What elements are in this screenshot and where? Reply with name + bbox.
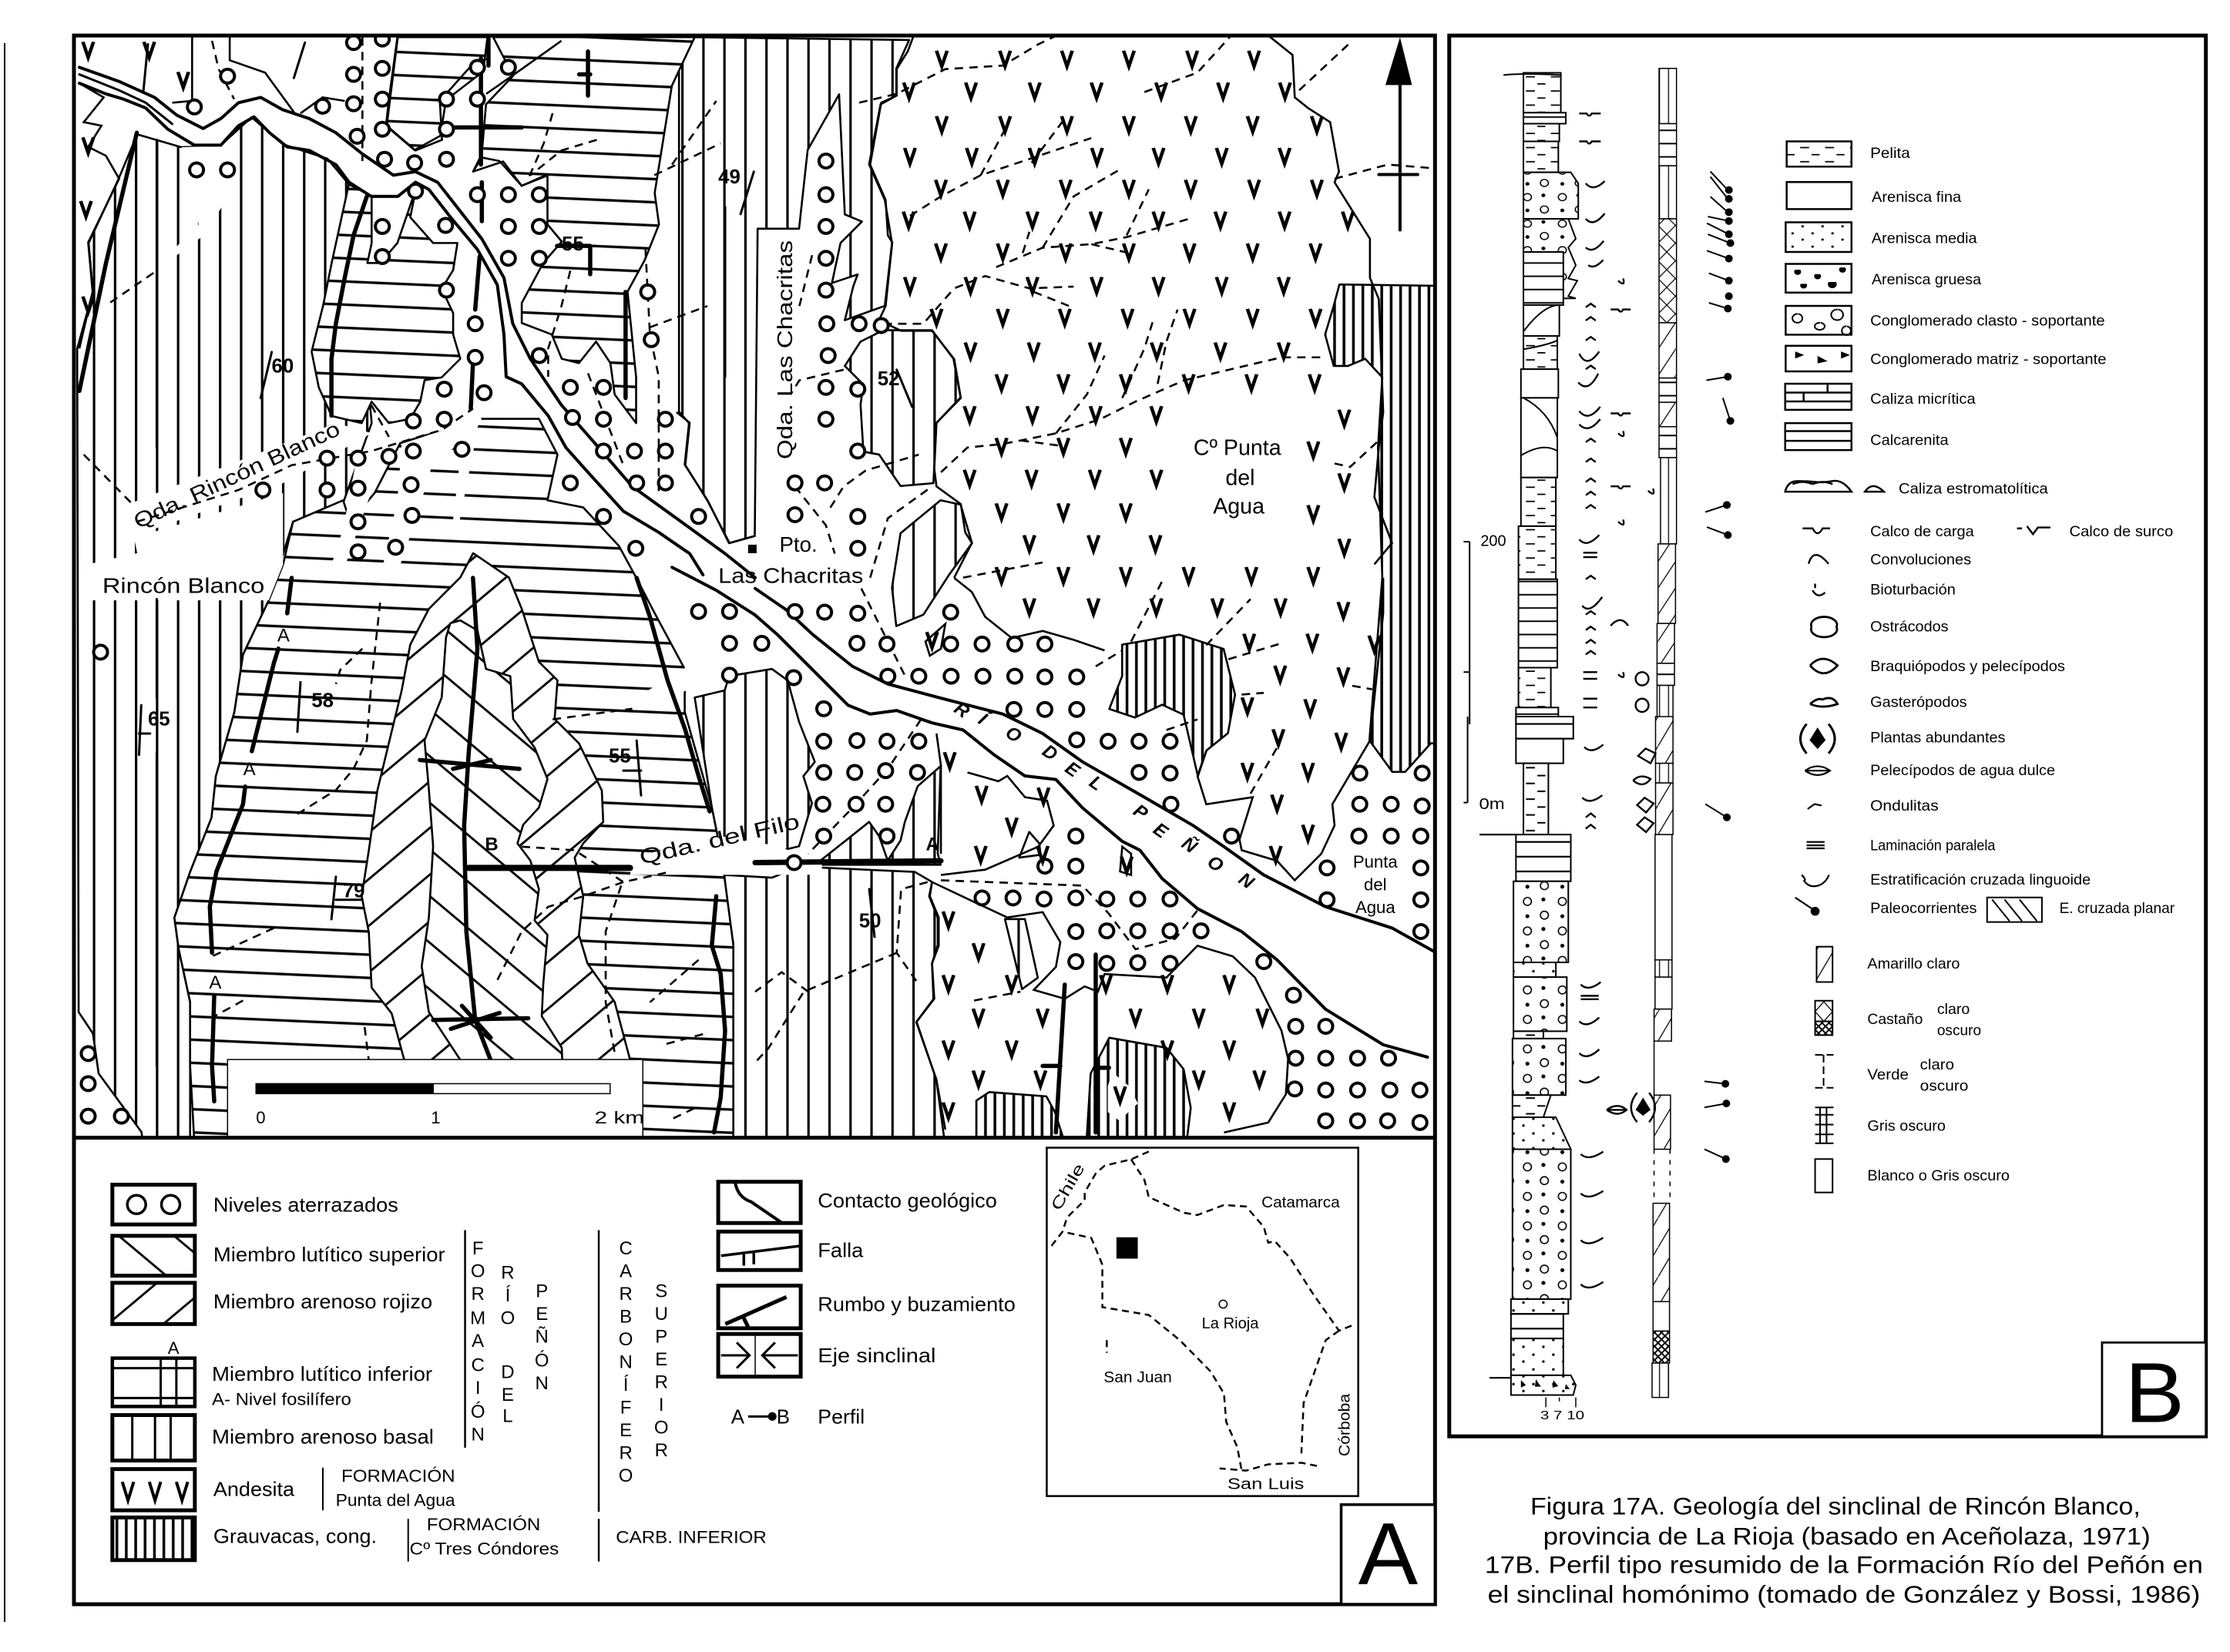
andesite marks (86, 49, 183, 304)
legend: Perfil (731, 1407, 865, 1429)
legend: Carbonifero Superior bracket (599, 1231, 669, 1512)
scale bar box: 0 (256, 1108, 266, 1127)
unit: vertical hatch patch south of 52 (892, 500, 972, 626)
unit: grauvacas south blocks (976, 1038, 1191, 1143)
legend: Carbonifero Superior bracket: R (619, 1284, 633, 1304)
unit: miembro lutitico inferior, north left (386, 37, 488, 150)
legend: Carbonifero Superior bracket: O (619, 1466, 633, 1486)
fossil level and section letters: A (926, 834, 939, 855)
legend: Grauvacas: Grauvacas, cong. (213, 1526, 377, 1548)
profile scale and column labels (1479, 533, 1584, 1422)
dip values: 52 (878, 368, 900, 390)
panel letter A: A (1358, 1505, 1419, 1603)
terrace circles (88, 612, 730, 1116)
legend: Carbonifero Superior bracket: P (655, 1326, 667, 1347)
andesite contacts (870, 34, 1392, 578)
terrace circles (795, 161, 882, 549)
legend: Formacion Rio del Penon bracket: O (501, 1308, 515, 1328)
legend: Niveles aterrazados: Niveles aterrazados (213, 1195, 398, 1217)
terrace channels over the shale belt (177, 146, 686, 692)
map label: Cerro Punta del Agua: Agua (1213, 494, 1264, 519)
legend: Andesita: Punta del Agua (336, 1491, 455, 1510)
legend B labels: Laminación paralela (1870, 838, 1996, 855)
faults and strike marks (79, 37, 626, 415)
legend: Andesita: Andesita (213, 1479, 295, 1501)
legend B labels: Pelita (1870, 145, 1910, 162)
sedimentary symbols, upper (1578, 113, 1654, 712)
legend: Miembro lutitico inferior: Miembro lutítico inferior (212, 1364, 433, 1385)
legend: Niveles aterrazados (113, 1184, 398, 1224)
panel A: geological map (77, 34, 1442, 1143)
dip values: 79 (343, 881, 365, 902)
unit: miembro lutitico inferior, north right (473, 37, 695, 423)
legend: Rumbo y buzamiento: Rumbo y buzamiento (818, 1294, 1016, 1316)
unit: miembro arenoso basal (vertical hatch, west) (77, 117, 371, 1143)
figure caption: el sinclinal homónimo (tomado de González y Bossi, 1986) (1488, 1581, 2200, 1608)
legend B labels: Bioturbación (1870, 582, 1956, 599)
unit: miembro arenoso rojizo (lens outer) (361, 553, 632, 1086)
paleocurrents, upper (1705, 172, 1731, 535)
color column, lower (1652, 717, 1673, 1398)
legend: Carbonifero Superior bracket: R (655, 1440, 668, 1461)
legend: Miembro lutitico superior (113, 1236, 445, 1276)
legend: Grauvacas: FORMACIÓN (427, 1515, 540, 1534)
legend B fossils (1810, 617, 1838, 707)
dip values: 55 (609, 745, 631, 767)
figure caption: provincia de La Rioja (basado en Aceñolaza, 1971) (1543, 1523, 2151, 1550)
legend B labels: Arenisca media (1872, 230, 1977, 247)
page margin mark (4, 43, 5, 1622)
legend B labels: Conglomerado clasto - soportante (1870, 313, 2105, 330)
fossil level and section letters: B (485, 834, 499, 855)
legend B labels: Ostrácodos (1870, 618, 1949, 635)
legend B: E. cruzada planar swatch (1987, 898, 2042, 922)
legend: Carbonifero Superior bracket: R (655, 1372, 668, 1392)
inset location map: La Rioja (1202, 1315, 1259, 1332)
strike symbol 52 (897, 370, 912, 407)
map label: Punta del Agua: Punta (1353, 852, 1398, 871)
map label: Pto. Las Chacritas: Pto. (779, 532, 818, 556)
legend: Carbonifero Superior bracket: F (620, 1398, 631, 1419)
legend: Grauvacas: Cº Tres Cóndores (410, 1539, 559, 1558)
panel B: stratigraphic profile (1449, 35, 2206, 1436)
unit: miembro lutitico inferior, large southern belt (174, 419, 734, 1143)
north arrow (1379, 37, 1418, 230)
legend B labels: Convoluciones (1870, 552, 1971, 569)
legend B labels: Verde (1867, 1066, 1909, 1083)
legend B: paleocurrent dot (1811, 907, 1819, 915)
legend B labels: claro (1937, 1001, 1970, 1018)
figure caption: 17B. Perfil tipo resumido de la Formación Río del Peñón en (1485, 1551, 2203, 1578)
legend: Eje sinclinal (718, 1334, 935, 1377)
syncline axis symbols (420, 760, 529, 1038)
scale bar box: 1 (431, 1108, 441, 1127)
map label: Cerro Punta del Agua (1194, 436, 1281, 519)
unit: miembro lutitico superior (lens inner) (421, 620, 563, 1086)
depth ticks text (1546, 1398, 1576, 1407)
profile scale and column labels: 3 7 10 (1540, 1409, 1584, 1422)
label band: Qda. Rincon Blanco stream (80, 423, 822, 875)
legend: Carbonifero Superior bracket: E (620, 1420, 632, 1441)
legend: Rumbo y buzamiento (718, 1286, 1016, 1328)
base marks and triangles (1521, 1379, 1570, 1389)
andesite contacts (917, 578, 1383, 1133)
legend B labels: Amarillo claro (1867, 955, 1960, 972)
river and contacts, north-west quadrant (79, 37, 755, 578)
legend: Miembro lutitico inferior: A (168, 1338, 180, 1358)
inset location map: Córboba (1337, 1393, 1354, 1456)
sedimentary symbols, lower (1580, 744, 1656, 1288)
legend B labels: Calco de carga (1870, 523, 1974, 540)
dip values: 55 (562, 233, 584, 255)
panel B frame (1449, 35, 2206, 1436)
faults (1043, 955, 1109, 1133)
map label: Qda. Las Chacritas: Qda. Las Chacritas (773, 240, 797, 459)
inset location map: Catamarca (1261, 1194, 1340, 1211)
unit: vertical hatch east of fold (695, 669, 814, 852)
legend: Carbonifero Superior bracket: E (655, 1349, 667, 1370)
legend B labels: Caliza estromatolítica (1899, 480, 2048, 497)
map label: Qda. Rincon Blanco: Qda. Rincón Blanco (129, 417, 344, 533)
map label: Pto. Las Chacritas (718, 532, 863, 588)
terrace circles (762, 612, 1422, 1123)
legend B labels (1867, 145, 2175, 1184)
legend: Contacto geologico: Contacto geológico (818, 1190, 997, 1212)
legend: Andesita (113, 1466, 455, 1510)
streams (84, 37, 720, 522)
plant and pelecypod marks in column (1607, 1093, 1655, 1122)
legend B labels: oscuro (1920, 1078, 1968, 1095)
legend: Carbonifero Superior bracket: O (654, 1417, 669, 1438)
legend: Formacion Rio del Penon bracket (465, 1231, 549, 1448)
map label: Punta del Agua: Agua (1355, 898, 1395, 917)
section line end A (755, 861, 941, 862)
profile column upper part (1463, 69, 2050, 724)
figure caption: Figura 17A. Geología del sinclinal de Rincón Blanco, (1530, 1493, 2141, 1520)
unit: vertical hatch small outliers (1005, 832, 1041, 989)
fossil level and section letters: A (243, 759, 256, 780)
unit: miembro lutitico inferior, central (311, 184, 460, 423)
andesite marks (908, 59, 1348, 575)
legend: Miembro lutitico superior: Miembro lutítico superior (213, 1244, 445, 1266)
legend: Carbonifero Superior bracket: B (620, 1307, 632, 1328)
strike symbols (143, 42, 754, 448)
legend: Formacion Rio del Penon bracket: P (536, 1281, 548, 1301)
legend: Miembro arenoso rojizo: Miembro arenoso rojizo (213, 1291, 432, 1313)
fossil level and section letters: A (277, 625, 290, 646)
legend B labels: Blanco o Gris oscuro (1867, 1167, 2010, 1184)
legend B labels: Calco de surco (2069, 523, 2173, 540)
map label: Cerro Punta del Agua: del (1225, 465, 1255, 490)
dip values: 65 (148, 708, 170, 730)
legend B lithology swatches (1785, 142, 1884, 492)
legend B labels: Conglomerado matriz - soportante (1870, 351, 2106, 368)
legend B labels: Gris oscuro (1867, 1117, 1946, 1134)
panel letter B: B (2124, 1346, 2185, 1441)
streams (212, 603, 703, 1119)
Rio del Penon banks north-west (79, 67, 755, 578)
legend: Carbonifero Superior bracket: S (655, 1281, 667, 1301)
section line A-B (469, 865, 630, 871)
legend: Perfil: Perfil (818, 1407, 865, 1429)
legend: Miembro lutitico inferior (113, 1338, 433, 1409)
legend: Carbonifero Superior bracket: A (620, 1261, 632, 1281)
geologic contacts (79, 37, 755, 543)
legend B labels: claro (1920, 1056, 1954, 1073)
legend: Formacion Rio del Penon bracket: Ó (535, 1351, 549, 1372)
paleocurrents, lower (1704, 804, 1727, 1159)
panel letter B (2102, 1342, 2206, 1441)
legend: Formacion Rio del Penon bracket: F (472, 1238, 483, 1259)
legend: Formacion Rio del Penon bracket: A (472, 1331, 484, 1351)
dip values: 50 (859, 910, 882, 932)
scale line (1463, 542, 1469, 724)
legend: Carbonifero Superior bracket: Í (623, 1375, 629, 1395)
legend: Formacion Rio del Penon bracket: L (502, 1406, 513, 1427)
figure caption (1485, 1493, 2203, 1608)
legend B labels: Gasterópodos (1870, 693, 1967, 710)
streams (755, 582, 1372, 1063)
legend B labels: Caliza micrítica (1870, 391, 1976, 408)
unit: miembro arenoso basal (vertical hatch, north centre) (679, 37, 909, 543)
legend B labels: Braquiópodos y pelecípodos (1870, 658, 2065, 675)
legend: Miembro arenoso basal (113, 1415, 434, 1461)
south-west quadrant (88, 567, 755, 1133)
legend: Carbonifero Superior bracket: U (655, 1304, 668, 1325)
legend B labels: oscuro (1937, 1022, 1981, 1039)
unit: vertical hatch patch near section end (821, 766, 941, 865)
legend: Formacion Rio del Penon bracket: Ó (471, 1402, 485, 1422)
profile scale and column labels: 0m (1479, 796, 1505, 813)
legend: Miembro lutitico inferior: A- Nivel fosilífero (212, 1390, 351, 1409)
legend: Grauvacas (113, 1515, 559, 1562)
legend B labels: Pelecípodos de agua dulce (1870, 762, 2055, 779)
legend: Eje sinclinal: Eje sinclinal (818, 1345, 935, 1367)
legend: Formacion Rio del Penon bracket: C (471, 1355, 485, 1375)
legend: Formacion Rio del Penon bracket: I (475, 1378, 480, 1398)
fossil level and section letters (209, 625, 939, 993)
map label: Rio del Penon: RÍO DEL PEÑON (950, 698, 1258, 894)
legend: Formacion Rio del Penon bracket: E (536, 1304, 548, 1325)
strike symbol 50 (869, 889, 875, 937)
dip values: 58 (311, 690, 334, 711)
syncline axis (464, 578, 493, 1066)
legend B labels: E. cruzada planar (2060, 900, 2175, 917)
legend B labels: Ondulitas (1870, 797, 1939, 814)
legend: Formacion Rio del Penon bracket: Ñ (536, 1326, 549, 1347)
legend: Perfil: B (777, 1407, 790, 1429)
panel A frame (74, 35, 1435, 1604)
legend: Falla: Falla (818, 1241, 864, 1262)
map label: Rincon Blanco: Rincón Blanco (102, 574, 264, 598)
legend: Carbonifero Superior bracket: N (619, 1352, 633, 1373)
inset map borders (1052, 1151, 1355, 1471)
legend: Formacion Rio del Penon bracket: N (471, 1425, 485, 1446)
unit: miembro arenoso basal (vertical hatch, south centre) (722, 866, 945, 1143)
legend: Falla (718, 1231, 864, 1270)
strike symbols (139, 599, 641, 1066)
unit: grauvacas east block (1325, 284, 1442, 772)
legend: Carb. Inferior: CARB. INFERIOR (616, 1528, 767, 1547)
map label: Pto. Las Chacritas: Las Chacritas (718, 564, 863, 588)
map label: Qda. del Filo: Qda. del Filo (637, 809, 802, 869)
legend A: stratigraphic units (113, 1184, 559, 1562)
legend: Carbonifero Superior bracket: R (619, 1443, 633, 1464)
scale bar box (227, 1059, 644, 1142)
fossil horizons A (210, 578, 725, 1133)
south-east quadrant (755, 578, 1433, 1133)
legend: Perfil: A (731, 1407, 745, 1429)
legend B: plants icon (1800, 724, 1835, 754)
legend: Formacion Rio del Penon bracket: R (501, 1262, 515, 1283)
scale bar box: 2 km (595, 1108, 644, 1127)
streams (791, 34, 1432, 578)
river bank link (672, 567, 755, 615)
unit: grauvacas central block (1110, 635, 1235, 776)
legend: Formacion Rio del Penon bracket: D (501, 1362, 515, 1382)
legend: Carbonifero Superior bracket: O (619, 1329, 633, 1350)
inset location map: San Luis (1228, 1476, 1305, 1493)
inset location map: San Juan (1103, 1369, 1172, 1386)
legend B labels: Plantas abundantes (1870, 729, 2005, 746)
legend: Formacion Rio del Penon bracket: O (471, 1261, 485, 1281)
legend B labels: Calcarenita (1870, 432, 1949, 449)
inset location map: Chile (1048, 1160, 1089, 1214)
legend: Formacion Rio del Penon bracket: E (502, 1385, 514, 1405)
legend B labels: Paleocorrientes (1870, 900, 1977, 917)
legend: Formacion Rio del Penon bracket: M (470, 1308, 485, 1328)
dip values: 60 (272, 356, 294, 378)
color column, upper (1657, 69, 1677, 724)
legend: Contacto geologico (718, 1182, 997, 1223)
map label: Cerro Punta del Agua: Cº Punta (1194, 436, 1281, 461)
unit: vertical hatch patch, dip 52 (845, 331, 961, 486)
profile scale and column labels: 200 (1480, 533, 1506, 550)
legend: Formacion Rio del Penon bracket: R (471, 1284, 485, 1304)
legend: Miembro arenoso rojizo (113, 1283, 432, 1324)
legend B labels: Estratificación cruzada linguoide (1870, 871, 2091, 888)
legend B small icons (1795, 766, 1830, 911)
terrace circles (194, 39, 699, 552)
legend B labels: Arenisca fina (1872, 189, 1961, 206)
legend B labels: Castaño (1867, 1011, 1923, 1028)
lithology column, upper (1503, 73, 1578, 724)
legend: Formacion Rio del Penon bracket: N (536, 1373, 549, 1394)
north-east quadrant (791, 34, 1432, 578)
inset location map (1046, 1147, 1358, 1496)
legend: Formacion Rio del Penon bracket: Í (505, 1285, 511, 1306)
scale line end (1463, 717, 1468, 803)
dip values (148, 166, 900, 932)
map label: Punta del Agua (1353, 852, 1398, 917)
profile column lower part (1463, 717, 2042, 1407)
panel letter A (1341, 1505, 1435, 1604)
lithology column, lower (1511, 717, 1576, 1395)
fossil level and section letters: A (209, 972, 221, 993)
legend: Carbonifero Superior bracket: C (619, 1238, 633, 1259)
Rio del Penon banks south-east (755, 589, 1433, 1057)
legend: Carbonifero Superior bracket: I (659, 1395, 664, 1415)
dip values: 49 (718, 166, 741, 188)
legend: Miembro arenoso basal: Miembro arenoso basal (212, 1426, 434, 1448)
legend B labels: Arenisca gruesa (1872, 271, 1981, 288)
legend B structure icons (1802, 526, 2050, 596)
andesite marks (932, 606, 1375, 1110)
legend: Andesita: FORMACIÓN (341, 1466, 455, 1486)
legend B: color swatches (1815, 947, 1833, 1193)
map label: Punta del Agua: del (1364, 875, 1387, 894)
